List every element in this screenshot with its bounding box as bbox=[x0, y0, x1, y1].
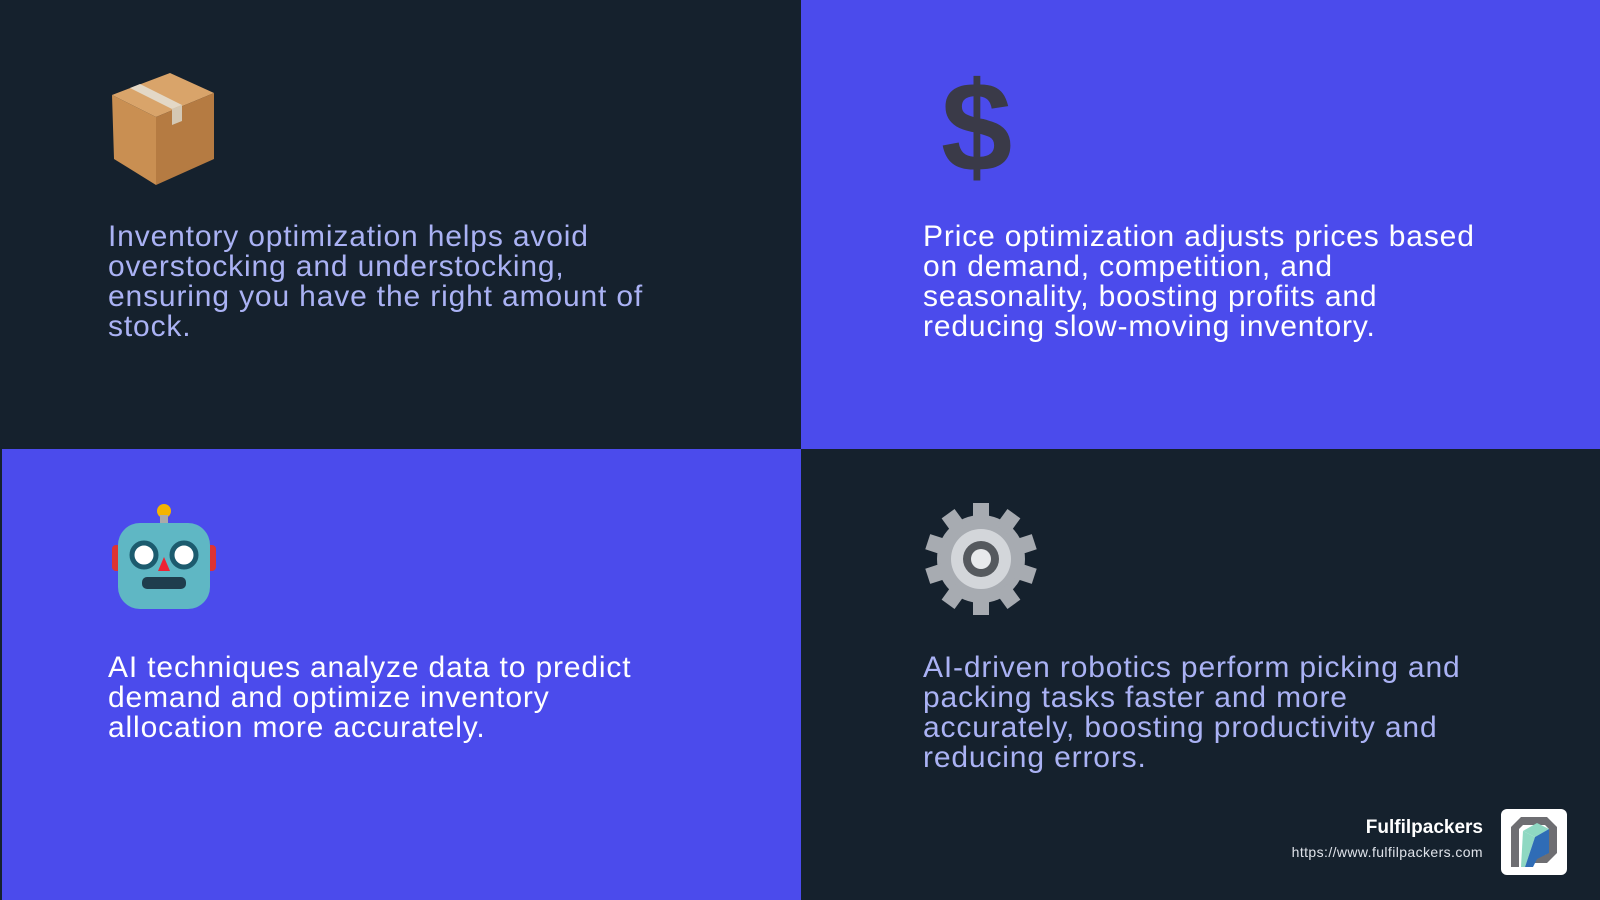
text: AI bbox=[108, 651, 631, 744]
text: AI: AI techniques analyze data to predict bbox=[108, 651, 631, 684]
brand text bbox=[1292, 817, 1483, 860]
panel: robotics bbox=[801, 449, 1600, 900]
icon: gear bbox=[925, 503, 1037, 615]
text: AI: demand and optimize inventory bbox=[108, 681, 550, 714]
text: price bbox=[923, 220, 1475, 343]
text: price: reducing slow-moving inventory. bbox=[923, 310, 1376, 343]
text: price: seasonality, boosting profits and bbox=[923, 280, 1377, 313]
text: price: on demand, competition, and bbox=[923, 250, 1333, 283]
text: inventory: overstocking and understocking, bbox=[108, 250, 565, 283]
icon: box bbox=[112, 73, 214, 185]
brand text: Fulfilpackers bbox=[1366, 817, 1483, 838]
icon: dollar: $ bbox=[941, 56, 1012, 199]
brand text: https://www.fulfilpackers.com bbox=[1292, 844, 1483, 860]
panel: AI bbox=[2, 449, 801, 900]
panel: inventory bbox=[2, 0, 801, 449]
text: robotics: accurately, boosting productivity and bbox=[923, 711, 1438, 744]
text: AI: allocation more accurately. bbox=[108, 711, 486, 744]
text: robotics: packing tasks faster and more bbox=[923, 681, 1348, 714]
text: robotics: AI-driven robotics perform picking and bbox=[923, 651, 1461, 684]
text: inventory bbox=[108, 220, 643, 343]
text: inventory: stock. bbox=[108, 310, 191, 343]
logo bbox=[1501, 809, 1567, 875]
text: price: Price optimization adjusts prices based bbox=[923, 220, 1475, 253]
text: robotics bbox=[923, 651, 1461, 774]
text: inventory: ensuring you have the right amount of bbox=[108, 280, 643, 313]
text: inventory: Inventory optimization helps avoid bbox=[108, 220, 589, 253]
panel: price bbox=[801, 0, 1600, 449]
icon: robot bbox=[112, 504, 216, 609]
text: robotics: reducing errors. bbox=[923, 741, 1147, 774]
